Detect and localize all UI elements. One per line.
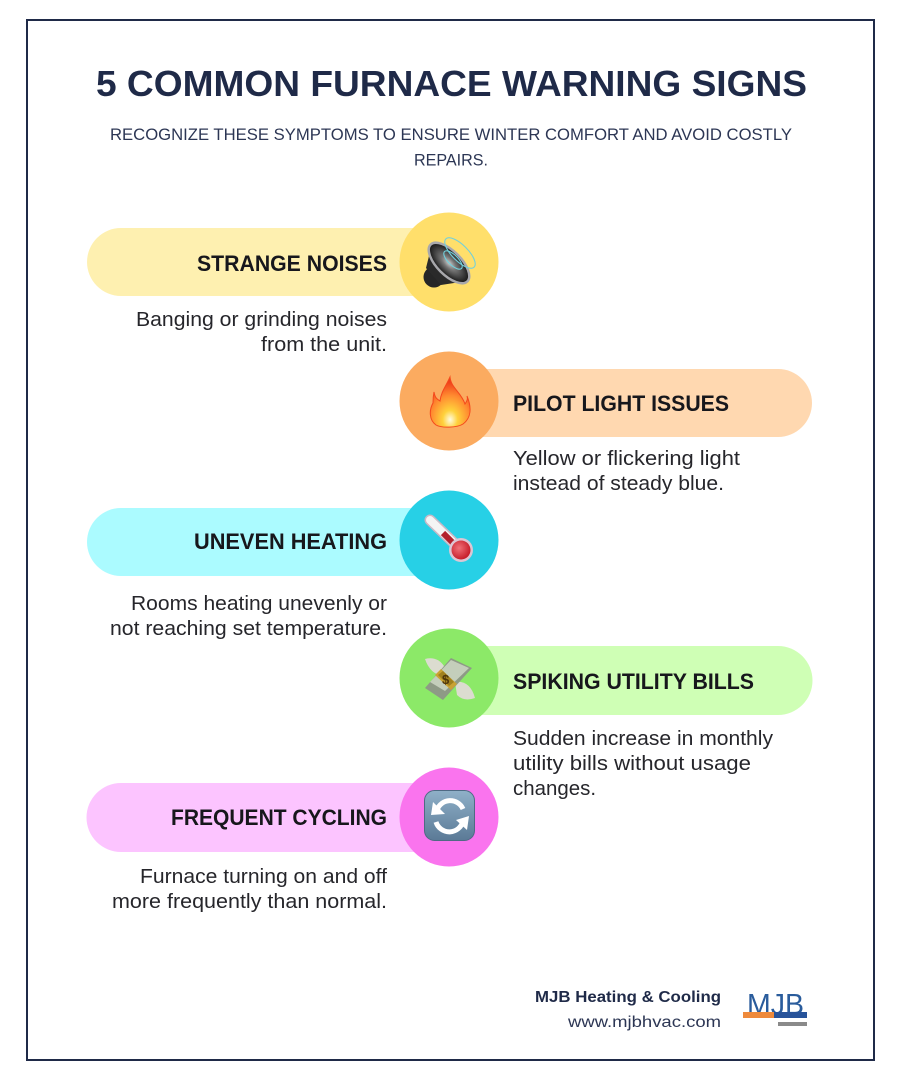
icon: thermometer: [430, 520, 473, 562]
heading: spiking utility bills: SPIKING UTILITY BILLS: [513, 669, 754, 694]
footer: website: www.mjbhvac.com: [567, 1014, 721, 1031]
icon circle: frequent cycling: [400, 768, 498, 866]
panel: pilot light issues: [400, 352, 812, 495]
footer: company name: MJB Heating & Cooling: [535, 989, 721, 1006]
icon: money with wings: [425, 658, 475, 700]
description: spiking utility bills: changes.: [513, 778, 596, 800]
description: pilot light issues: instead of steady blue.: [513, 473, 724, 495]
panel: frequent cycling: [87, 768, 499, 913]
title: 5 COMMON FURNACE WARNING SIGNS: [96, 63, 807, 104]
icon: cycling arrows: [424, 790, 474, 840]
pill: strange noises: [87, 228, 440, 296]
icon circle: strange noises: [400, 212, 498, 312]
icon circle: spiking utility bills: [400, 628, 498, 728]
description: strange noises: Banging or grinding noises: [136, 309, 387, 331]
description: strange noises: [136, 309, 387, 356]
logo: MJB: MJB: [747, 989, 804, 1021]
description: spiking utility bills: utility bills without usage: [513, 753, 751, 775]
pill: uneven heating: [87, 508, 440, 576]
icon: fire: [430, 377, 470, 427]
description: uneven heating: not reaching set temperature.: [110, 618, 387, 640]
heading: strange noises: STRANGE NOISES: [197, 251, 387, 276]
pill: spiking utility bills: [460, 646, 813, 715]
panel: uneven heating: [87, 490, 498, 640]
heading: pilot light issues: PILOT LIGHT ISSUES: [513, 391, 729, 416]
description: pilot light issues: [513, 448, 740, 495]
icon circle: uneven heating: [400, 490, 498, 590]
description: frequent cycling: Furnace turning on and off: [140, 866, 387, 888]
description: frequent cycling: [112, 866, 387, 913]
heading: uneven heating: UNEVEN HEATING: [194, 529, 387, 554]
description: spiking utility bills: [513, 728, 773, 800]
icon: speaker: [422, 233, 480, 290]
panel: strange noises: [87, 212, 499, 356]
pill: pilot light issues: [460, 369, 812, 437]
pill: frequent cycling: [87, 783, 440, 852]
icon circle: pilot light issues: [400, 352, 498, 450]
description: spiking utility bills: Sudden increase in monthly: [513, 728, 773, 750]
subtitle: [110, 125, 792, 170]
description: strange noises: from the unit.: [261, 334, 387, 356]
description: frequent cycling: more frequently than normal.: [112, 891, 387, 913]
description: uneven heating: [110, 593, 387, 640]
subtitle: REPAIRS.: [414, 150, 488, 170]
icon: money with wings: $: [442, 672, 450, 687]
subtitle: RECOGNIZE THESE SYMPTOMS TO ENSURE WINTER COMFORT AND AVOID COSTLY: [110, 125, 792, 144]
description: uneven heating: Rooms heating unevenly or: [131, 593, 387, 615]
panel: spiking utility bills: [400, 628, 813, 800]
description: pilot light issues: Yellow or flickering light: [513, 448, 740, 470]
heading: frequent cycling: FREQUENT CYCLING: [171, 805, 387, 830]
